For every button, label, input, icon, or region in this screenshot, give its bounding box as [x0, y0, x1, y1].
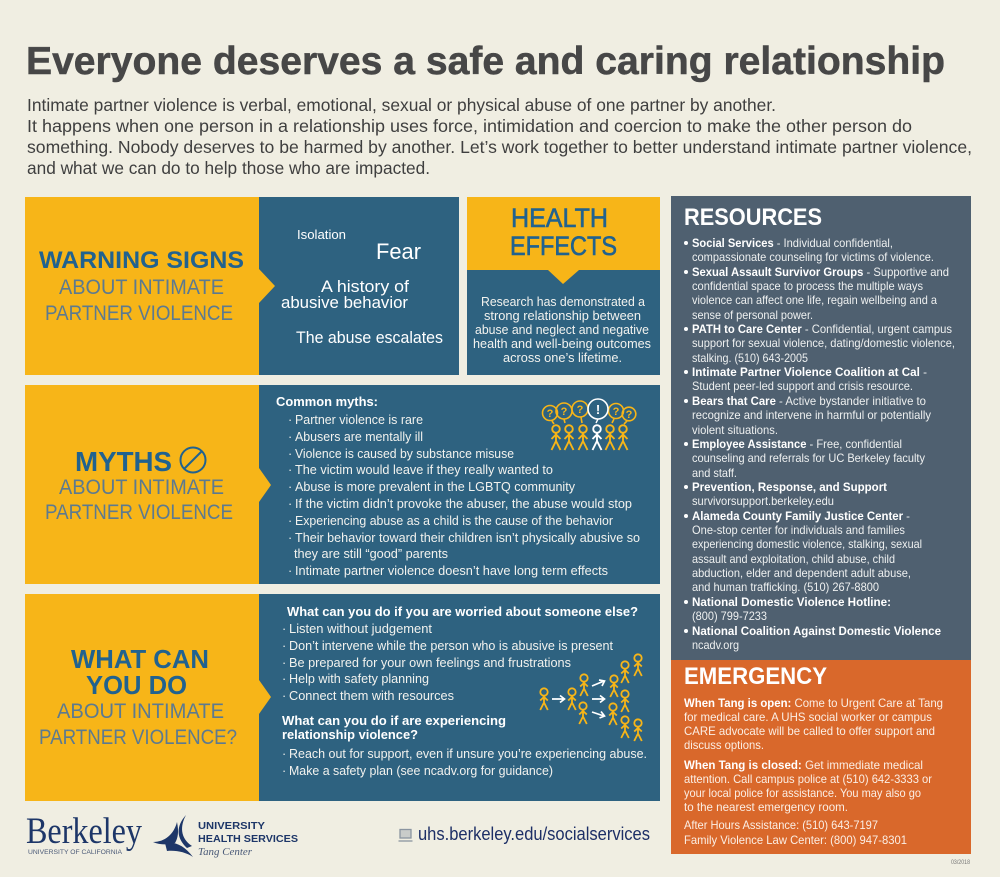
- action list: experiencing violence: ·: [282, 764, 286, 778]
- title: Everyone deserves a safe and caring relationship: [26, 40, 945, 83]
- date stamp: 03/2018: [951, 860, 971, 866]
- action list: worried about someone else: Be prepared for your own feelings and frustrations: [289, 656, 571, 670]
- action list: worried about someone else: ·: [282, 622, 286, 636]
- warning sign list: Fear: [376, 239, 421, 264]
- icon: people spreading support: [540, 654, 642, 741]
- myths list: ·: [288, 463, 292, 477]
- emergency text: Family Violence Law Center: (800) 947-8301: [684, 833, 907, 847]
- icon: crowd with speech bubbles: ?: [547, 408, 554, 420]
- health effects text: strong relationship between: [484, 309, 641, 323]
- resource list: and staff.: [692, 466, 737, 480]
- action list: worried about someone else: ·: [282, 672, 286, 686]
- myths list: they are still “good” parents: [294, 547, 448, 561]
- intro text block: [27, 95, 972, 178]
- resource list: Sexual Assault Survivor Groups - Supportive and: [692, 265, 949, 279]
- emergency text: for medical care. A UHS social worker or campus: [684, 710, 932, 724]
- panel: myths: [25, 385, 660, 584]
- action list: experiencing violence: Make a safety plan (see ncadv.org for guidance): [289, 764, 553, 778]
- heading: what can you do: [39, 644, 237, 749]
- logo: Berkeley: Berkeley: [26, 811, 142, 852]
- myths list: Abuse is more prevalent in the LGBTQ community: [295, 480, 576, 494]
- panel: resources: [671, 196, 971, 660]
- heading: myths: [45, 446, 233, 524]
- resource list: abduction, elder and dependent adult abuse,: [692, 566, 911, 580]
- panel: warning signs: [25, 197, 459, 375]
- myths list: ·: [288, 514, 292, 528]
- logo: Berkeley: UNIVERSITY OF CALIFORNIA: [28, 849, 123, 856]
- resource list: experiencing domestic violence, stalking, sexual: [692, 537, 922, 551]
- resource list: support for sexual violence, dating/domestic violence,: [692, 336, 955, 350]
- intro text block: It happens when one person in a relationship uses force, intimidation and coercion to make the other person do: [27, 116, 912, 136]
- logo: University Health Services: Tang Center: [198, 846, 253, 858]
- health effects text: abuse and neglect and negative: [475, 323, 649, 337]
- intro text block: and what we can do to help those who are impacted.: [27, 158, 430, 178]
- action list: experiencing violence: relationship violence?: [282, 728, 418, 742]
- intro text block: something. Nobody deserves to be harmed by another. Let’s work together to better understand intimate partner violence,: [27, 137, 972, 157]
- action list: experiencing violence: What can you do if are experiencing: [282, 714, 506, 728]
- action list: worried about someone else: What can you do if you are worried about someone else?: [287, 605, 638, 619]
- action list: worried about someone else: Connect them with resources: [289, 689, 454, 703]
- resource list: National Domestic Violence Hotline:: [692, 595, 891, 609]
- resource list: confidential space to process the multiple ways: [692, 279, 923, 293]
- intro text block: Intimate partner violence is verbal, emotional, sexual or physical abuse of one partner by another.: [27, 95, 776, 115]
- myths list: Common myths:: [276, 395, 378, 409]
- action list: experiencing violence: Reach out for support, even if unsure you’re experiencing abuse.: [289, 747, 647, 761]
- health effects text: Research has demonstrated a: [481, 295, 645, 309]
- resource list: Intimate Partner Violence Coalition at Cal -: [692, 365, 927, 379]
- warning sign list: Isolation: [297, 228, 346, 242]
- icon: prohibition sign: [180, 448, 206, 472]
- heading: what can you do: PARTNER VIOLENCE?: [39, 726, 237, 749]
- resource list: compassionate counseling for victims of violence.: [692, 250, 934, 264]
- resource list: (800) 799-7233: [692, 609, 767, 623]
- action list: worried about someone else: Listen without judgement: [289, 622, 433, 636]
- heading: warning signs: PARTNER VIOLENCE: [45, 302, 233, 325]
- health effects text: [473, 295, 651, 365]
- emergency text: [684, 696, 943, 847]
- action list: worried about someone else: ·: [282, 639, 286, 653]
- heading: warning signs: ABOUT INTIMATE: [59, 276, 224, 299]
- icon: crowd with speech bubbles: ?: [561, 406, 568, 418]
- action list: worried about someone else: [282, 605, 638, 703]
- resource list: sense of personal power.: [692, 308, 813, 322]
- myths list: ·: [288, 413, 292, 427]
- resource list: assault and exploitation, child abuse, child: [692, 552, 895, 566]
- heading: myths: PARTNER VIOLENCE: [45, 501, 233, 524]
- emergency text: CARE advocate will be called to offer support and: [684, 724, 935, 738]
- heading: health effects: EFFECTS: [510, 231, 617, 261]
- warning sign list: The abuse escalates: [296, 329, 443, 347]
- logo: University Health Services: HEALTH SERVICES: [198, 834, 298, 845]
- warning sign list: A history of: [321, 278, 409, 296]
- emergency text: After Hours Assistance: (510) 643-7197: [684, 818, 878, 832]
- myths list: [276, 395, 640, 578]
- website link: uhs.berkeley.edu/socialservices: [418, 824, 650, 844]
- heading: health effects: HEALTH: [511, 203, 608, 233]
- heading: warning signs: WARNING SIGNS: [39, 247, 244, 274]
- heading: what can you do: YOU DO: [86, 670, 187, 700]
- emergency text: When Tang is open: Come to Urgent Care at Tang: [684, 696, 943, 710]
- myths list: ·: [288, 447, 292, 461]
- icon: laptop: [398, 830, 412, 841]
- myths list: ·: [288, 430, 292, 444]
- emergency text: your local police for assistance. You may also go: [684, 786, 921, 800]
- resource list: survivorsupport.berkeley.edu: [692, 494, 834, 508]
- myths list: Violence is caused by substance misuse: [295, 447, 514, 461]
- icon: crowd with speech bubbles: ?: [626, 409, 633, 421]
- resource list: and human trafficking. (510) 267-8800: [692, 580, 879, 594]
- resource list: National Coalition Against Domestic Violence: [692, 624, 941, 638]
- resource list: One-stop center for individuals and families: [692, 523, 905, 537]
- health effects text: across one’s lifetime.: [503, 351, 622, 365]
- action list: experiencing violence: [282, 714, 647, 778]
- panel: what can you do: [25, 594, 660, 801]
- emergency text: When Tang is closed: Get immediate medical: [684, 758, 923, 772]
- myths list: ·: [288, 480, 292, 494]
- heading: myths: MYTHS: [75, 446, 172, 477]
- myths list: If the victim didn’t provoke the abuser, the abuse would stop: [295, 497, 632, 511]
- resource list: Bears that Care - Active bystander initiative to: [692, 394, 926, 408]
- heading: health effects: [510, 203, 617, 261]
- emergency text: discuss options.: [684, 738, 764, 752]
- health effects text: health and well-being outcomes: [473, 337, 651, 351]
- myths list: Partner violence is rare: [295, 413, 423, 427]
- myths list: ·: [288, 531, 292, 545]
- emergency text: to the nearest emergency room.: [684, 800, 848, 814]
- resource list: PATH to Care Center - Confidential, urgent campus: [692, 322, 952, 336]
- action list: experiencing violence: ·: [282, 747, 286, 761]
- myths list: Abusers are mentally ill: [295, 430, 423, 444]
- logo: University Health Services: [153, 815, 298, 858]
- icon: crowd with speech bubbles: ?: [577, 404, 584, 416]
- myths list: ·: [288, 564, 292, 578]
- resource list: Prevention, Response, and Support: [692, 480, 887, 494]
- resource list: [684, 236, 955, 652]
- resource list: violent situations.: [692, 423, 778, 437]
- action list: worried about someone else: ·: [282, 689, 286, 703]
- action list: worried about someone else: ·: [282, 656, 286, 670]
- warning sign list: [281, 228, 443, 347]
- myths list: ·: [288, 497, 292, 511]
- resource list: stalking. (510) 643-2005: [692, 351, 808, 365]
- resource list: violence can affect one life, regain wellbeing and a: [692, 293, 937, 307]
- panel: health effects: [467, 197, 660, 375]
- action list: worried about someone else: Help with safety planning: [289, 672, 429, 686]
- resource list: Alameda County Family Justice Center -: [692, 509, 910, 523]
- myths list: Their behavior toward their children isn’t physically abusive so: [295, 531, 640, 545]
- logo: University Health Services: UNIVERSITY: [198, 821, 265, 832]
- resource list: counseling and referrals for UC Berkeley faculty: [692, 451, 925, 465]
- warning sign list: abusive behavior: [281, 294, 409, 312]
- heading: what can you do: ABOUT INTIMATE: [57, 700, 224, 723]
- resource list: Employee Assistance - Free, confidential: [692, 437, 902, 451]
- panel: emergency: [671, 660, 971, 854]
- resource list: Student peer-led support and crisis resource.: [692, 379, 913, 393]
- myths list: The victim would leave if they really wanted to: [295, 463, 553, 477]
- icon: crowd with speech bubbles: [542, 399, 636, 450]
- heading: what can you do: WHAT CAN: [71, 644, 209, 674]
- action list: worried about someone else: Don’t intervene while the person who is abusive is present: [289, 639, 614, 653]
- heading: myths: ABOUT INTIMATE: [59, 476, 224, 499]
- resource list: recognize and intervene in harmful or potentially: [692, 408, 931, 422]
- icon: crowd with speech bubbles: ?: [613, 406, 620, 418]
- myths list: Experiencing abuse as a child is the cause of the behavior: [295, 514, 613, 528]
- heading: warning signs: [39, 247, 244, 325]
- icon: Tang Center mark: [153, 815, 193, 857]
- emergency text: attention. Call campus police at (510) 642-3333 or: [684, 772, 932, 786]
- heading: resources: RESOURCES: [684, 204, 822, 231]
- resource list: Social Services - Individual confidential,: [692, 236, 893, 250]
- myths list: Intimate partner violence doesn’t have long term effects: [295, 564, 608, 578]
- resource list: ncadv.org: [692, 638, 739, 652]
- heading: emergency: EMERGENCY: [684, 663, 827, 690]
- icon: crowd with speech bubbles: !: [596, 402, 600, 417]
